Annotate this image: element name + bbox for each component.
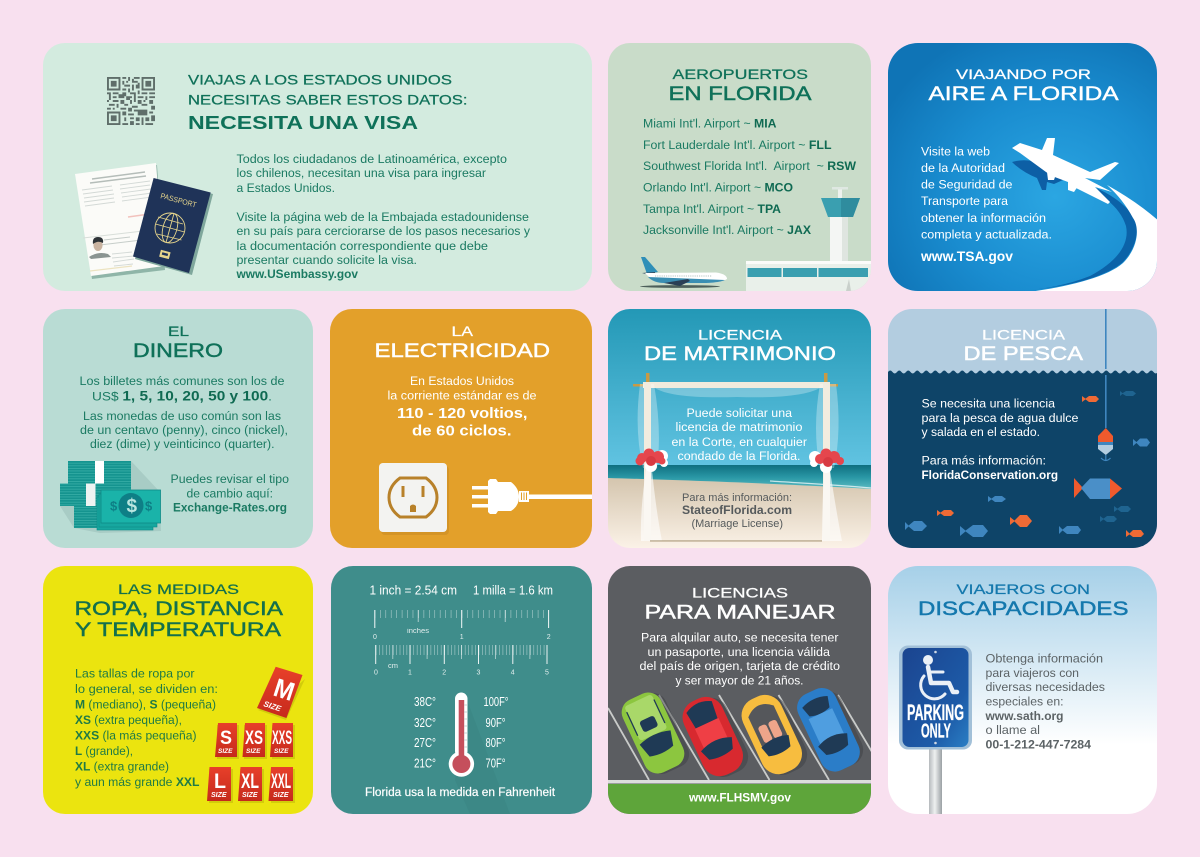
- text: voltage: [388, 374, 537, 440]
- icon: thermometer: [449, 692, 510, 814]
- heading: las medidas: Y TEMPERATURA: [75, 619, 281, 641]
- chart: centimetre ruler: 4: [511, 670, 515, 676]
- text: visa details: Todos los ciudadanos de Latinoamérica, excepto: [236, 152, 507, 166]
- chart: centimetre ruler: 5: [545, 670, 549, 676]
- text: marriage request: [672, 406, 807, 463]
- text: airport list: Orlando Int'l. Airport ~ MCO: [643, 180, 793, 194]
- icon: size tags: XS: [245, 728, 263, 749]
- panel: licencia de pesca: [888, 309, 1157, 548]
- text: TSA info: [920, 144, 1052, 264]
- text: marriage info: [682, 492, 792, 530]
- text: airport list: Miami Int'l. Airport ~ MIA: [643, 116, 777, 130]
- text: fahrenheit note: Florida usa la medida en Fahrenheit: [365, 787, 556, 799]
- heading: licencias para manejar: LICENCIAS: [692, 584, 788, 600]
- text: airport list: Jacksonville Int'l. Airport ~ JAX: [643, 223, 812, 237]
- text: bills and coins: Los billetes más comunes son los de: [80, 374, 285, 388]
- footer band: website: www.FLHSMV.gov: [688, 790, 791, 804]
- illustration: large fish: [1074, 478, 1122, 499]
- heading: licencia de pesca: [965, 330, 1084, 360]
- text: accessibility info: diversas necesidades: [986, 680, 1105, 694]
- heading: viajando por aire: [928, 69, 1119, 100]
- text: exchange rates: Puedes revisar el tipo: [170, 472, 289, 486]
- text: bills and coins: [80, 374, 288, 451]
- icon: QR code: [107, 77, 155, 125]
- text: voltage: 110 - 120 voltios,: [397, 405, 528, 422]
- text: clothing sizes: XXS (la más pequeña): [75, 728, 196, 742]
- illustration: money stacks: [60, 461, 161, 533]
- icon: fishing line and bobber: [1098, 309, 1113, 460]
- text: accessibility info: 00-1-212-447-7284: [986, 738, 1091, 752]
- chart: inch ruler: inches: [407, 628, 430, 635]
- illustration: passport: PASSPORT: [159, 191, 198, 210]
- text: TSA info: obtener la información: [921, 211, 1046, 225]
- panel: licencias para manejar: [608, 566, 875, 814]
- text: visa details: la documentación correspondiente que debe: [236, 239, 488, 253]
- text: airport list: Tampa Int'l. Airport ~ TPA: [643, 202, 781, 216]
- text: unit conversions: 1 inch = 2.54 cm: [370, 584, 457, 598]
- sign text: [907, 700, 964, 742]
- heading: la electricidad: ELECTRICIDAD: [374, 340, 550, 362]
- heading: licencias para manejar: [646, 588, 835, 619]
- heading: viajeros con discapacidades: VIAJEROS CON: [956, 581, 1090, 597]
- heading: viajando por aire: AIRE A FLORIDA: [928, 83, 1118, 105]
- text: celsius labels: 27C°: [414, 736, 436, 750]
- panel: necesita una visa: [43, 43, 592, 291]
- text: airport list: Southwest Florida Int'l. Airport ~ RSW: [643, 159, 856, 173]
- heading: el dinero: [134, 326, 222, 358]
- text: clothing sizes: L (grande),: [75, 744, 133, 758]
- text: exchange rates: [170, 472, 289, 514]
- text: fahrenheit labels: 80F°: [486, 736, 506, 750]
- text: accessibility info: Obtenga información: [986, 652, 1103, 666]
- heading: el dinero: EL: [168, 323, 189, 339]
- chart: inch ruler: 0: [373, 634, 377, 641]
- illustration: airliner on runway: [640, 257, 727, 288]
- icon: right flowers: [809, 448, 844, 473]
- illustration: passport: [75, 163, 213, 279]
- icon: size tags: SIZE: [246, 748, 261, 755]
- text: visa details: a Estados Unidos.: [236, 181, 335, 195]
- text: fishing info: para la pesca de agua dulce: [922, 411, 1079, 425]
- icon: size tags: [207, 667, 305, 803]
- heading: viajeros con discapacidades: DISCAPACIDADES: [918, 598, 1128, 620]
- icon: size tags: M: [270, 672, 298, 707]
- text: clothing sizes: XL (extra grande): [75, 760, 169, 774]
- text: accessibility info: www.sath.org: [985, 709, 1064, 723]
- panel: viajando por aire: [888, 43, 1160, 295]
- illustration: blue car: [792, 681, 868, 777]
- icon: size tags: SIZE: [211, 792, 227, 799]
- text: visa details: www.USembassy.gov: [236, 267, 358, 281]
- text: fishing info: FloridaConservation.org: [922, 468, 1058, 482]
- text: visa details: los chilenos, necesitan una visa para ingresar: [236, 166, 486, 180]
- text: marriage request: licencia de matrimonio: [676, 420, 803, 434]
- heading: licencia de matrimonio: DE MATRIMONIO: [644, 343, 836, 365]
- text: celsius labels: 38C°: [414, 695, 436, 709]
- illustration: parking lot lines: [608, 695, 875, 780]
- text: driving requirements: del país de origen, tarjeta de crédito: [640, 659, 840, 673]
- text: fishing info: y salada en el estado.: [922, 425, 1040, 439]
- text: bills and coins: US$ 1, 5, 10, 20, 50 y 100 .: [92, 388, 272, 404]
- illustration: small fish: [905, 391, 1150, 537]
- text: fahrenheit labels: 70F°: [486, 756, 506, 770]
- heading: aeropuertos: AEROPUERTOS: [672, 66, 808, 82]
- illustration: yellow convertible: [736, 687, 812, 782]
- text: accessibility info: o llame al: [986, 723, 1040, 737]
- text: accessibility info: para viajeros con: [986, 666, 1079, 680]
- text: clothing sizes: [75, 666, 218, 789]
- text: TSA info: www.TSA.gov: [920, 248, 1013, 264]
- text: marriage info: StateofFlorida.com: [682, 503, 792, 517]
- sign text: PARKING: [907, 700, 964, 725]
- text: celsius labels: 32C°: [414, 716, 436, 730]
- icon: size tags: SIZE: [242, 792, 258, 799]
- icon: electrical outlet: [379, 463, 449, 535]
- text: visa details: en su país para cerciorarse de los pasos necesarios y: [236, 224, 531, 238]
- text: unit conversions: [370, 584, 553, 598]
- text: accessibility info: especiales en:: [986, 694, 1064, 708]
- chart: centimetre ruler: 2: [442, 670, 446, 676]
- text: airport list: [643, 116, 856, 237]
- heading: licencia de matrimonio: LICENCIA: [698, 326, 783, 342]
- text: airport list: Fort Lauderdale Int'l. Airport ~ FLL: [643, 138, 832, 152]
- chart: centimetre ruler: [374, 645, 549, 676]
- chart: inch ruler: 1: [460, 634, 464, 641]
- text: driving requirements: un pasaporte, una licencia válida: [648, 645, 830, 659]
- text: marriage request: en la Corte, en cualquier: [672, 435, 807, 449]
- illustration: money stacks: $: [110, 498, 118, 514]
- icon: parking sign: [899, 646, 972, 816]
- panel: el dinero: [43, 309, 313, 548]
- heading: las medidas: LAS MEDIDAS: [118, 581, 239, 597]
- icon: size tags: SIZE: [262, 699, 283, 714]
- icon: size tags: SIZE: [273, 792, 289, 799]
- text: visa details: presentar cuando solicite la visa.: [236, 253, 417, 267]
- chart: centimetre ruler: 3: [476, 670, 480, 676]
- text: voltage: la corriente estándar es de: [388, 388, 537, 402]
- text: marriage info: (Marriage License): [692, 518, 783, 530]
- text: celsius labels: [414, 695, 436, 770]
- chart: inch ruler: [373, 610, 551, 641]
- text: clothing sizes: XS (extra pequeña),: [75, 713, 182, 727]
- text: clothing sizes: lo general, se dividen en:: [75, 682, 218, 696]
- heading: necesita una visa: NECESITAS SABER ESTOS DATOS:: [188, 92, 468, 108]
- heading: aeropuertos: EN FLORIDA: [668, 83, 812, 105]
- text: fahrenheit labels: [484, 695, 508, 770]
- chart: centimetre ruler: cm: [388, 663, 398, 670]
- icon: size tags: SIZE: [218, 748, 233, 755]
- illustration: wedding arch: [633, 373, 844, 542]
- panel: aeropuertos en florida: [608, 43, 871, 291]
- text: exchange rates: de cambio aquí:: [186, 486, 273, 500]
- text: clothing sizes: M (mediano), S (pequeña): [75, 698, 216, 712]
- heading: necesita una visa: VIAJAS A LOS ESTADOS UNIDOS: [188, 72, 452, 88]
- text: celsius labels: 21C°: [414, 756, 436, 770]
- sign text: ONLY: [921, 720, 951, 742]
- text: exchange rates: Exchange-Rates.org: [173, 500, 287, 514]
- icon: size tags: XXS: [272, 728, 292, 749]
- heading: viajando por aire: VIAJANDO POR: [956, 66, 1091, 82]
- icon: wheelchair symbol: [921, 655, 957, 699]
- heading: aeropuertos: [670, 69, 812, 100]
- text: marriage request: condado de la Florida.: [678, 449, 800, 463]
- panel: las medidas: [43, 566, 313, 814]
- icon: size tags: XL: [241, 770, 259, 793]
- text: bills and coins: Las monedas de uso común son las: [83, 409, 281, 423]
- text: driving requirements: [640, 630, 840, 688]
- chart: inch ruler: 2: [547, 634, 551, 641]
- text: TSA info: de Seguridad de: [921, 178, 1013, 192]
- heading: licencia de matrimonio: [646, 330, 836, 360]
- panel: viajeros con discapacidades: [888, 566, 1157, 816]
- icon: plug and cord: [472, 479, 592, 514]
- icon: left flowers: [636, 448, 668, 472]
- icon: size tags: L: [214, 770, 226, 793]
- illustration: control tower and terminal: [746, 187, 871, 291]
- text: voltage: En Estados Unidos: [410, 374, 514, 388]
- heading: licencia de pesca: LICENCIA: [982, 326, 1066, 342]
- text: driving requirements: y ser mayor de 21 años.: [676, 674, 804, 688]
- text: marriage request: Puede solicitar una: [686, 406, 792, 420]
- text: fishing info: Se necesita una licencia: [922, 396, 1055, 410]
- text: fahrenheit labels: 100F°: [484, 695, 508, 709]
- heading: necesita una visa: [188, 72, 468, 133]
- text: voltage: de 60 ciclos.: [412, 422, 512, 440]
- text: driving requirements: Para alquilar auto, se necesita tener: [641, 630, 838, 644]
- illustration: beach: [608, 465, 871, 548]
- illustration: green car: [622, 692, 689, 774]
- heading: el dinero: DINERO: [133, 340, 223, 362]
- text: fishing info: Para más información:: [922, 454, 1046, 468]
- footer band: website: [608, 780, 871, 814]
- panel: la electricidad: [330, 309, 592, 548]
- icon: size tags: SIZE: [274, 748, 289, 755]
- text: TSA info: completa y actualizada.: [921, 228, 1052, 242]
- heading: las medidas: [74, 581, 283, 641]
- illustration: money stacks: $: [145, 498, 153, 514]
- text: fahrenheit labels: 90F°: [486, 716, 506, 730]
- icon: size tags: XXL: [271, 770, 291, 793]
- text: visa details: Visite la página web de la Embajada estadounidense: [236, 210, 529, 224]
- chart: centimetre ruler: 0: [374, 670, 378, 676]
- heading: la electricidad: LA: [452, 323, 474, 339]
- text: clothing sizes: Las tallas de ropa por: [75, 666, 194, 680]
- panel: licencia de matrimonio: [608, 309, 871, 548]
- panel: conversions: [331, 566, 592, 814]
- text: bills and coins: diez (dime) y veinticinco (quarter).: [90, 437, 274, 451]
- text: visa details: [236, 152, 531, 281]
- text: fishing info: [922, 396, 1079, 482]
- heading: las medidas: ROPA, DISTANCIA: [74, 598, 283, 620]
- heading: la electricidad: [376, 326, 550, 358]
- text: marriage info: Para más información:: [682, 492, 792, 504]
- illustration: red car: [682, 696, 748, 777]
- text: TSA info: de la Autoridad: [921, 161, 1005, 175]
- illustration: plane and contrail: [1012, 138, 1157, 291]
- illustration: money stacks: $: [126, 496, 138, 517]
- text: clothing sizes: y aun más grande XXL: [75, 775, 200, 789]
- heading: viajeros con discapacidades: [918, 581, 1128, 620]
- chart: centimetre ruler: 1: [408, 670, 412, 676]
- heading: licencia de pesca: DE PESCA: [964, 343, 1083, 365]
- text: TSA info: Transporte para: [921, 194, 1008, 208]
- heading: necesita una visa: NECESITA UNA VISA: [188, 112, 418, 133]
- text: TSA info: Visite la web: [921, 144, 990, 158]
- text: bills and coins: de un centavo (penny), cinco (nickel),: [80, 423, 288, 437]
- heading: licencias para manejar: PARA MANEJAR: [644, 602, 836, 624]
- icon: size tags: S: [220, 728, 232, 749]
- text: accessibility info: [985, 652, 1105, 752]
- text: unit conversions: 1 milla = 1.6 km: [473, 584, 553, 598]
